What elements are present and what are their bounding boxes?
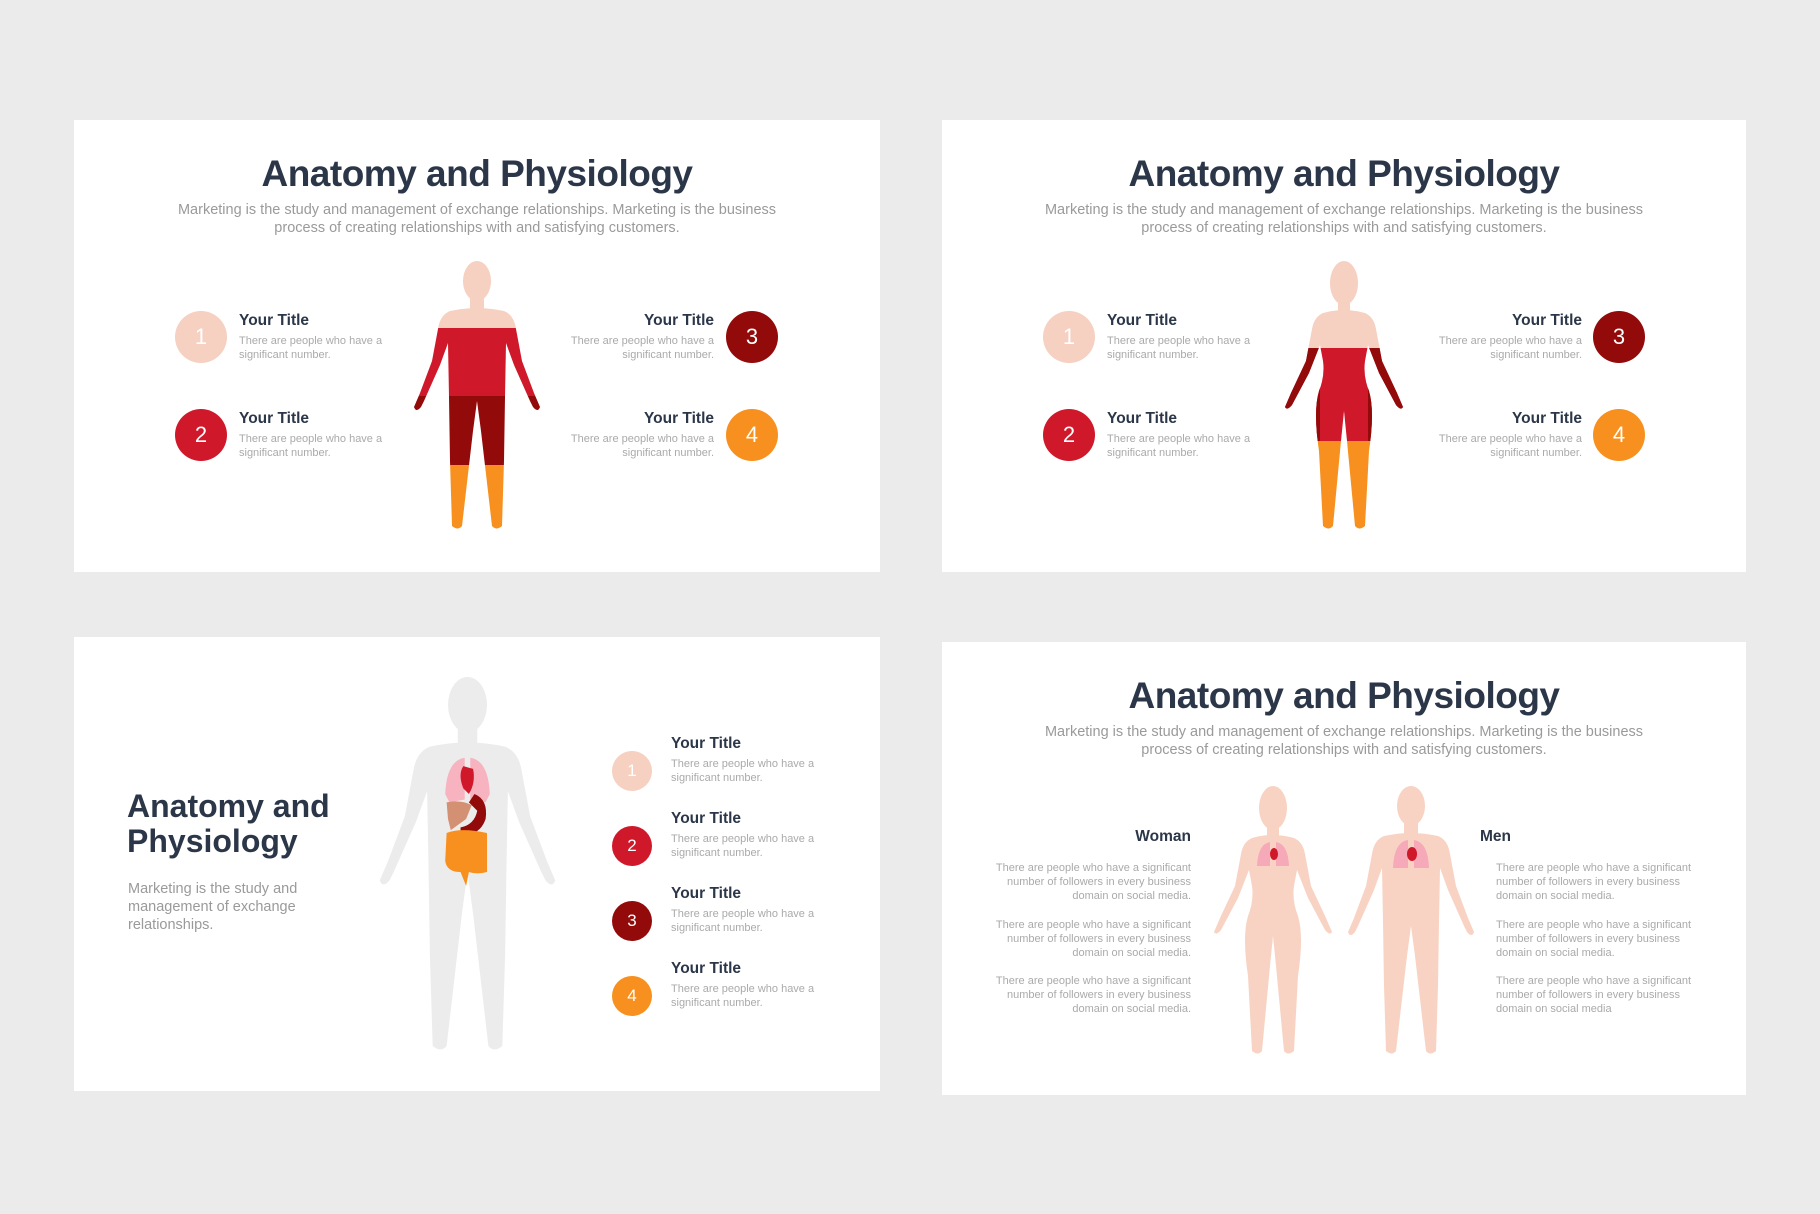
bullets: woman: number of followers in every business	[1007, 876, 1191, 888]
panel: female body segments: There are people who have a	[1439, 433, 1582, 445]
panel: organs: significant number.	[671, 772, 763, 784]
panel: organs: Your Title	[671, 810, 741, 827]
item 3	[726, 311, 778, 363]
panel: female body segments: Your Title	[1512, 312, 1582, 329]
panel: woman and men: domain on social media.	[1496, 947, 1615, 959]
item 1: 1	[627, 761, 637, 780]
description: Marketing is the study and	[128, 881, 297, 897]
panel: male body segments	[74, 120, 880, 572]
panel: male body segments: Your Title	[239, 410, 309, 427]
panel: female body segments	[942, 120, 1746, 572]
title	[127, 788, 330, 859]
description: relationships.	[128, 917, 213, 933]
panel: male body segments: There are people who have a	[571, 433, 714, 445]
panel: female body segments: There are people who have a	[1107, 335, 1250, 347]
panel: female body segments: significant number.	[1490, 349, 1582, 361]
label: men: Men	[1480, 828, 1511, 845]
panel: male body segments: significant number.	[622, 447, 714, 459]
panel: organs: Your Title	[671, 885, 741, 902]
panel: organs: Your Title	[671, 960, 741, 977]
panel: woman and men: number of followers in every business	[1496, 933, 1680, 945]
title: Anatomy and Physiology	[261, 153, 692, 194]
panel: female body segments: significant number.	[1107, 447, 1199, 459]
subtitle: Marketing is the study and management of exchange relationships. Marketing is the business	[1045, 724, 1643, 740]
item 2	[1043, 409, 1095, 461]
panel: male body segments: significant number.	[239, 447, 331, 459]
item 4: 4	[627, 986, 637, 1005]
title: Anatomy and Physiology	[1128, 675, 1560, 716]
panel: organs: There are people who have a	[671, 758, 814, 770]
subtitle: process of creating relationships with and satisfying customers.	[1141, 220, 1547, 236]
panel: woman and men	[942, 642, 1746, 1095]
panel: organs: significant number.	[671, 922, 763, 934]
panel: woman and men: There are people who have a significant	[1496, 975, 1691, 987]
panel: organs: significant number.	[671, 847, 763, 859]
panel: organs: There are people who have a	[671, 983, 814, 995]
item 4: 4	[746, 422, 758, 447]
bullets: men: number of followers in every business	[1496, 876, 1680, 888]
item 1: 1	[195, 324, 207, 349]
panel: woman and men: domain on social media.	[1072, 947, 1191, 959]
description: management of exchange	[128, 899, 296, 915]
item 2	[612, 826, 652, 866]
item 3	[612, 901, 652, 941]
item 1: 1	[1063, 324, 1075, 349]
item 2: 2	[1063, 422, 1075, 447]
panel: male body segments: significant number.	[239, 349, 331, 361]
item 4	[612, 976, 652, 1016]
panel: female body segments: Your Title	[1512, 410, 1582, 427]
panel: female body segments: Your Title	[1107, 312, 1177, 329]
panel: woman and men: There are people who have a significant	[996, 975, 1191, 987]
panel: male body segments: Your Title	[239, 312, 309, 329]
panel: woman and men: There are people who have a significant	[1496, 919, 1691, 931]
bullets: men	[1496, 862, 1691, 902]
bullets: woman: domain on social media.	[1072, 890, 1191, 902]
item 4	[726, 409, 778, 461]
bullets: woman: There are people who have a significant	[996, 862, 1191, 874]
panel: male body segments: Your Title	[644, 312, 714, 329]
item 1	[612, 751, 652, 791]
bullets: woman	[996, 862, 1191, 902]
panel: woman and men: number of followers in every business	[1007, 933, 1191, 945]
panel: organs	[74, 637, 880, 1091]
panel: woman and men: number of followers in every business	[1007, 989, 1191, 1001]
item 2	[175, 409, 227, 461]
panel: woman and men: number of followers in every business	[1496, 989, 1680, 1001]
item 4: 4	[1613, 422, 1625, 447]
panel: organs: significant number.	[671, 997, 763, 1009]
subtitle: process of creating relationships with and satisfying customers.	[1141, 742, 1547, 758]
panel: organs: Your Title	[671, 735, 741, 752]
item 2: 2	[627, 836, 637, 855]
subtitle: Marketing is the study and management of exchange relationships. Marketing is the business	[178, 202, 776, 218]
panel: woman and men: domain on social media	[1496, 1003, 1612, 1015]
subtitle	[1045, 202, 1643, 236]
panel: female body segments: significant number.	[1490, 447, 1582, 459]
title: Anatomy and Physiology	[1128, 153, 1560, 194]
title: Physiology	[127, 823, 298, 859]
title: Anatomy and	[127, 788, 330, 824]
panel: male body segments: There are people who have a	[239, 433, 382, 445]
panel: male body segments: Your Title	[644, 410, 714, 427]
item 3	[1593, 311, 1645, 363]
item 1	[175, 311, 227, 363]
subtitle	[178, 202, 776, 236]
panel: male body segments: significant number.	[622, 349, 714, 361]
item 2: 2	[195, 422, 207, 447]
item 3: 3	[627, 911, 637, 930]
figure: grey body with organs	[380, 677, 555, 1050]
bullets: men: domain on social media.	[1496, 890, 1615, 902]
item 4	[1593, 409, 1645, 461]
panel: female body segments: Your Title	[1107, 410, 1177, 427]
figure: man	[1348, 786, 1474, 1054]
subtitle: process of creating relationships with and satisfying customers.	[274, 220, 680, 236]
figure: male colored	[414, 261, 540, 528]
panel: female body segments: significant number.	[1107, 349, 1199, 361]
organs	[445, 758, 490, 886]
panel: organs: There are people who have a	[671, 833, 814, 845]
subtitle	[1045, 724, 1643, 758]
item 1	[1043, 311, 1095, 363]
figure: woman	[1214, 786, 1332, 1054]
label: woman: Woman	[1135, 828, 1191, 845]
panel: female body segments: There are people who have a	[1107, 433, 1250, 445]
panel: woman and men: There are people who have a significant	[996, 919, 1191, 931]
panel: female body segments: There are people who have a	[1439, 335, 1582, 347]
item 3: 3	[746, 324, 758, 349]
panel: male body segments: There are people who have a	[239, 335, 382, 347]
bullets: men: There are people who have a significant	[1496, 862, 1691, 874]
panel: woman and men: domain on social media.	[1072, 1003, 1191, 1015]
item 3: 3	[1613, 324, 1625, 349]
panel: male body segments: There are people who have a	[571, 335, 714, 347]
panel: organs: There are people who have a	[671, 908, 814, 920]
figure: female colored	[1285, 261, 1403, 528]
subtitle: Marketing is the study and management of exchange relationships. Marketing is the business	[1045, 202, 1643, 218]
description	[128, 881, 297, 933]
